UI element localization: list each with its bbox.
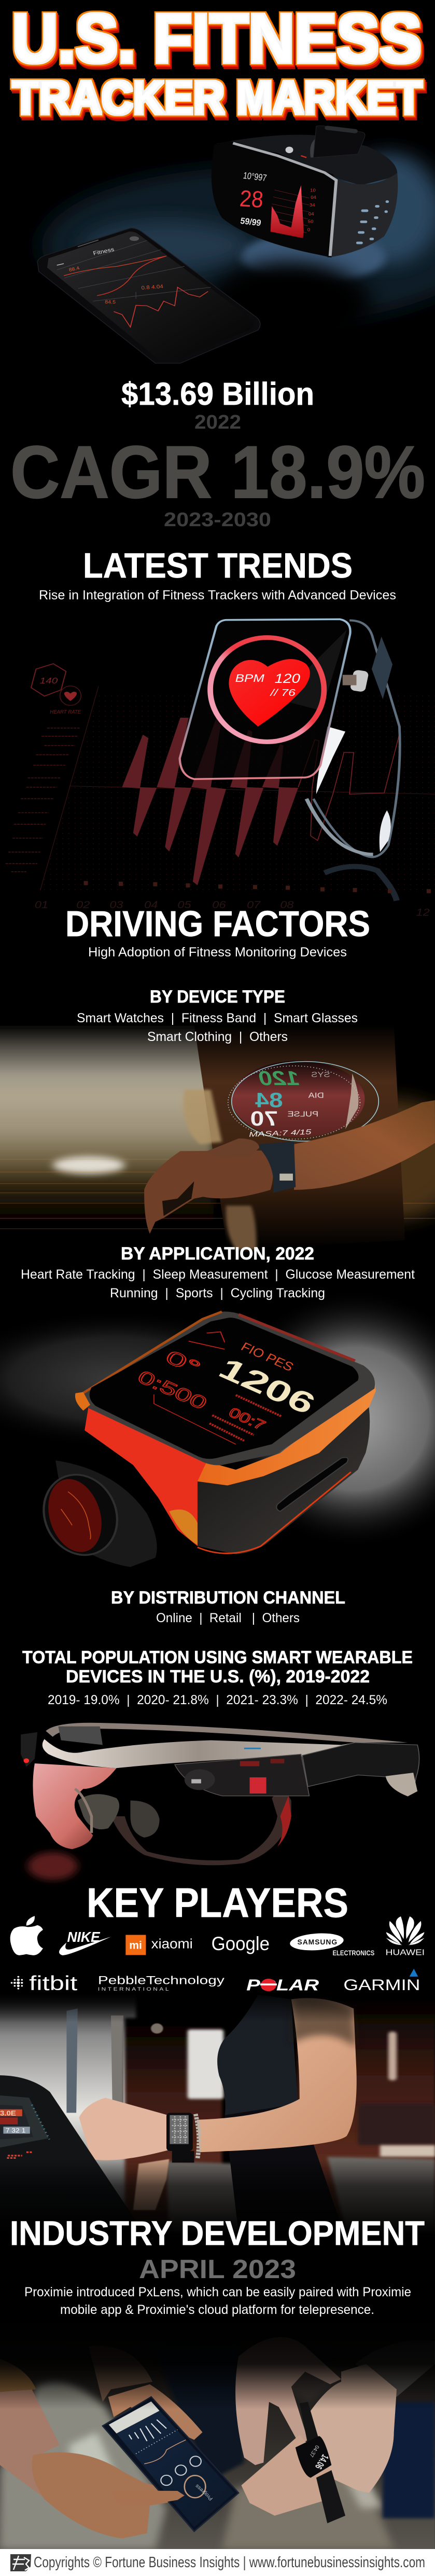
logo: Garmin: GARMIN [343, 1977, 420, 1993]
blurred track background [0, 1025, 214, 1236]
app progress label: Progress [194, 2483, 214, 2501]
logo: Fitbit [11, 1972, 77, 1995]
right person's hands [235, 2337, 397, 2516]
ECG waveform [122, 718, 298, 885]
axis markers: 03 [109, 899, 123, 910]
screen label: FIO PES [238, 1340, 296, 1374]
table surface glow [0, 153, 435, 361]
left finger on phone [109, 2490, 185, 2505]
arm [197, 1998, 357, 2152]
fitness band: 50 [308, 219, 314, 224]
market size value: $13.69 Billion [121, 376, 314, 412]
illustration: orange fitness tracker [0, 1289, 435, 1567]
axis markers: 12 [416, 907, 430, 918]
logo: Polar: POLAR [246, 1977, 319, 1994]
heading: key players: KEY PLAYERS [87, 1880, 348, 1926]
tracker top face [78, 1311, 375, 1465]
left person's hand [32, 2452, 185, 2539]
logo: Pebble Technology [98, 1975, 225, 1992]
heading: driving factors: DRIVING FACTORS [65, 903, 370, 944]
heart icon [229, 659, 310, 727]
trends illustration: smartwatch with heart rate hologram [6, 619, 435, 918]
fitness band: 34 [310, 203, 315, 208]
device type list line 2: Smart Clothing | Others [147, 1030, 288, 1044]
gym backdrop [0, 1992, 435, 2234]
logo: Nike: NIKE [67, 1929, 101, 1945]
bpm secondary value: // 76 [269, 688, 296, 698]
bpm value: 120 [275, 671, 301, 686]
photo: woman on treadmill with smartwatch [0, 1955, 435, 2236]
phone: 0.8 4.04 [141, 284, 163, 291]
axis markers: 05 [177, 899, 192, 910]
logo: Xiaomi: xiaomi [151, 1937, 193, 1952]
illustration: smart glasses [21, 1723, 419, 1880]
logo: Pebble Technology: INTERNATIONAL [98, 1987, 171, 1992]
screen temperature: 0° [161, 1346, 205, 1379]
photo top fade [0, 2308, 435, 2409]
heart rate badge [31, 664, 81, 715]
watch body [180, 619, 350, 779]
nose pads [78, 1794, 119, 1829]
logo: Xiaomi [125, 1935, 193, 1955]
watch strap and crown [306, 621, 400, 901]
backdrop glow [0, 1289, 435, 1549]
wrist band [259, 1141, 296, 1193]
sleeves [0, 2340, 435, 2498]
fitness band: 10 [310, 188, 316, 193]
fitness band: 04 [308, 212, 314, 216]
lower hand [133, 2159, 169, 2210]
heading line 2: DEVICES IN THE U.S. (%), 2019-2022 [66, 1667, 370, 1687]
CAGR period: 2023-2030 [164, 509, 271, 531]
panel: by application [21, 1244, 415, 1300]
tank top [217, 1995, 300, 2117]
industry development text line 2: mobile app & Proximie's cloud platform for telepresence. [60, 2303, 374, 2317]
panel: by device type [77, 987, 358, 1044]
logo: Samsung [289, 1931, 374, 1957]
application list line 2: Running | Sports | Cycling Tracking [110, 1286, 325, 1300]
dot grid [40, 692, 435, 892]
heart rate ring [211, 638, 324, 742]
hero illustration: fitness band and phone [0, 126, 435, 363]
heading: latest trends: LATEST TRENDS [83, 546, 353, 585]
electronics module [175, 1754, 310, 1796]
badge value: 140 [40, 676, 58, 686]
hologram diastolic: 84 [255, 1089, 283, 1112]
heading: by application: BY APPLICATION, 2022 [121, 1244, 314, 1264]
footer logo [10, 2554, 31, 2571]
logo: Garmin [343, 1969, 420, 1993]
latest trends text: Rise in Integration of Fitness Trackers with Advanced Devices [39, 588, 396, 602]
treadmill console: 7 32 1 [6, 2127, 25, 2134]
hologram pulse: 70 [250, 1107, 278, 1130]
fist [79, 2098, 169, 2160]
console digits: 3.0E [0, 2110, 16, 2117]
badge label: HEART RATE [50, 709, 81, 715]
axis markers [35, 899, 430, 918]
photo: hands with phone app and smartwatch [0, 2308, 435, 2549]
logo: Huawei: HUAWEI [386, 1948, 425, 1957]
smartwatch on palm [296, 2402, 345, 2523]
hologram display [228, 1061, 378, 1141]
band screen readouts: 10°997 [242, 170, 268, 183]
fitness band [212, 126, 398, 257]
application list line 1: Heart Rate Tracking | Sleep Measurement | Glucose Measurement [21, 1267, 415, 1282]
footer bar [0, 2549, 435, 2576]
tracker screen [90, 1318, 358, 1459]
logo: Fitbit: fitbit [29, 1972, 77, 1995]
logo: Samsung: SAMSUNG [298, 1939, 338, 1946]
left lens [33, 1763, 117, 1849]
treadmill console [0, 2075, 144, 2234]
logo: Huawei [386, 1916, 425, 1957]
device type list line 1: Smart Watches | Fitness Band | Smart Glasses [77, 1011, 358, 1025]
phone status title: Fitness [92, 246, 115, 257]
market size year: 2022 [194, 412, 241, 433]
axis markers: 07 [247, 899, 261, 910]
hand [144, 1150, 273, 1234]
phone: 84.5 [105, 300, 116, 305]
temple arm [302, 1743, 419, 1796]
heading: by device type: BY DEVICE TYPE [150, 987, 285, 1007]
panel: smart wearable population [22, 1648, 413, 1707]
screen value: 1206 [213, 1352, 321, 1421]
hologram label dia: DIA [308, 1091, 324, 1100]
fitness band: 0 [307, 227, 310, 232]
fitness band: 04 [311, 195, 316, 200]
logo: Xiaomi: mi [129, 1939, 142, 1952]
fitness band: 28 [238, 186, 264, 213]
forearm [294, 1100, 435, 1190]
logo: Apple [10, 1916, 43, 1955]
logo: Google: Google [212, 1933, 270, 1954]
axis markers: 02 [76, 899, 90, 910]
tracker strap and dial [35, 1405, 207, 1567]
heading line 1: TOTAL POPULATION USING SMART WEARABLE [22, 1648, 413, 1667]
phone [37, 228, 260, 363]
photo: runner checking wrist band [0, 1025, 435, 1250]
phone with fitness app [103, 2397, 238, 2531]
panel: by distribution channel [111, 1588, 345, 1625]
hologram systolic: 120 [259, 1067, 300, 1090]
distribution list: Online | Retail | Others [156, 1611, 300, 1625]
phone: 88.4 [68, 266, 80, 273]
lens reflection [27, 1852, 78, 1880]
yearly percentages: 2019- 19.0% | 2020- 21.8% | 2021- 23.3% | 2022- 24.5% [48, 1693, 387, 1707]
industry development date: APRIL 2023 [139, 2254, 296, 2284]
logo: Pebble Technology: PebbleTechnology [98, 1975, 225, 1987]
hologram date: MASA:7 4/15 [249, 1128, 312, 1139]
axis markers: 04 [144, 899, 158, 910]
heart rate chart [271, 185, 304, 238]
bottom fade [0, 2159, 435, 2236]
hologram label pulse: PULSE [288, 1109, 318, 1118]
axis markers: 08 [280, 899, 294, 910]
top frame [46, 1723, 408, 1743]
logo row [10, 1916, 425, 1995]
hologram label sys: SYS [311, 1070, 330, 1079]
logo: Samsung: ELECTRONICS [332, 1950, 374, 1957]
screen pace: 0:500 [134, 1366, 211, 1413]
background seat and jeans [0, 2311, 435, 2549]
screen metric: 00:7 [226, 1405, 269, 1433]
fitness band: 59/99 [240, 216, 262, 228]
axis markers: 06 [212, 899, 226, 910]
torso [194, 1025, 405, 1250]
smartwatch on palm: 04:37 [308, 2444, 320, 2458]
tracker side body [198, 1407, 370, 1554]
axis markers: 01 [35, 899, 48, 910]
smartwatch [166, 2113, 199, 2162]
red hinge light [21, 1732, 37, 1767]
orange trim strip [197, 1380, 376, 1485]
industry development text line 1: Proximie introduced PxLens, which can be easily paired with Proximie [24, 2285, 411, 2299]
title [12, 0, 422, 124]
driving factors text: High Adoption of Fitness Monitoring Devices [88, 945, 347, 960]
heading: by distribution channel: BY DISTRIBUTION CHANNEL [111, 1588, 345, 1608]
watch readout: 14.06 [313, 2452, 331, 2471]
bpm label: BPM [235, 673, 264, 684]
right lens rim [111, 1792, 291, 1865]
top fade [0, 1955, 435, 2022]
logo: Nike [59, 1929, 111, 1955]
